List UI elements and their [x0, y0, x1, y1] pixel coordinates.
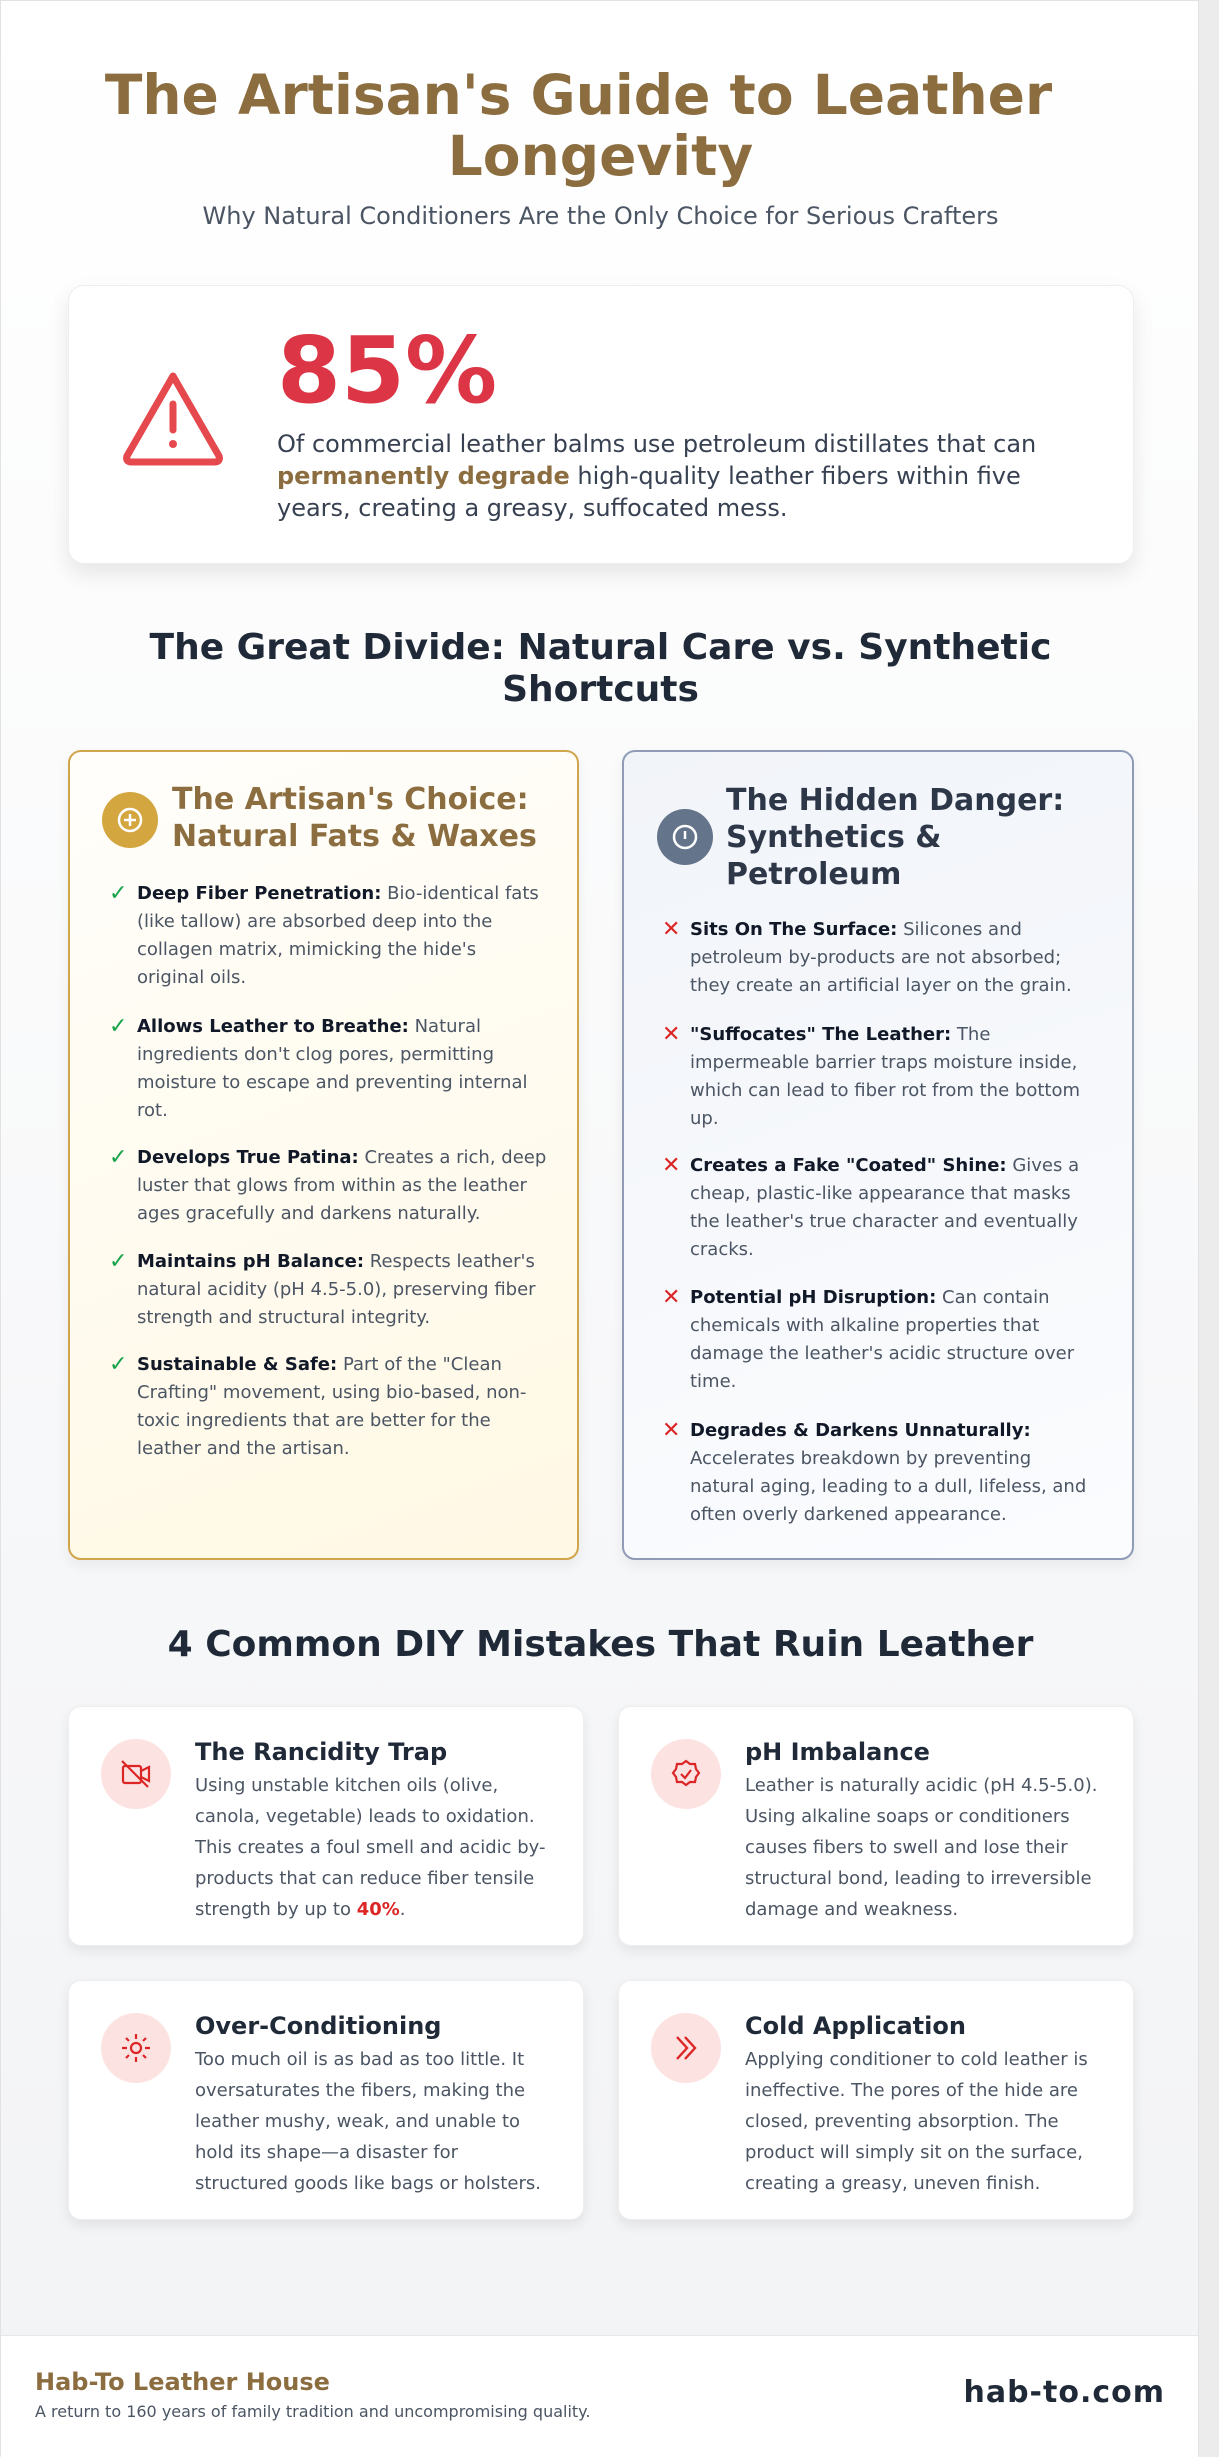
subtitle: Why Natural Conditioners Are the Only Choice for Serious Crafters: [202, 202, 998, 230]
panel: synthetic: Potential pH Disruption: Can contain chemicals with alkaline properties that damage the leather's acidic structure over time.: [690, 1287, 1074, 1392]
panel: synthetic: ✕: [662, 1022, 680, 1047]
panel: natural: Deep Fiber Penetration: Bio-identical fats (like tallow) are absorbed deep into the collagen matrix, mimicking the hide's original oils.: [137, 883, 539, 988]
panel: natural: Develops True Patina: Creates a rich, deep luster that glows from within as the leather ages gracefully and darkens naturally.: [137, 1147, 546, 1224]
card: ph: [618, 1706, 1134, 1946]
icon: [101, 2013, 171, 2083]
title: Over-Conditioning: [195, 2012, 441, 2040]
text: Leather is naturally acidic (pH 4.5-5.0). Using alkaline soaps or conditioners causes fibers to swell and lose their structural bond, leading to irreversible damage and weakness.: [745, 1775, 1097, 1920]
panel: synthetic: "Suffocates" The Leather: The impermeable barrier traps moisture inside, which can lead to fiber rot from the bottom up.: [690, 1024, 1080, 1129]
footer: [1, 2335, 1198, 2457]
panel heading: Natural Fats & Waxes: [172, 819, 537, 854]
tagline: A return to 160 years of family tradition and uncompromising quality.: [35, 2402, 590, 2421]
panel: synthetic: Sits On The Surface: Silicones and petroleum by-products are not absorbed; they create an artificial layer on the grain.: [690, 919, 1072, 996]
panel heading: Synthetics &: [726, 820, 941, 855]
text: Using unstable kitchen oils (olive, canola, vegetable) leads to oxidation. This creates a foul smell and acidic by-products that can reduce fiber tensile strength by up to 40%.: [195, 1775, 546, 1920]
panel heading: [172, 782, 537, 854]
stat number: 85%: [277, 317, 497, 424]
panel: natural: Maintains pH Balance: Respects leather's natural acidity (pH 4.5-5.0), preserving fiber strength and structural integrity.: [137, 1251, 536, 1328]
brand: Hab-To Leather House: [35, 2368, 330, 2396]
title: The Artisan's Guide to Leather: [105, 63, 1052, 127]
icon: [651, 1739, 721, 1809]
icon: [651, 2013, 721, 2083]
card: rancidity: [68, 1706, 584, 1946]
card: over-conditioning: [68, 1980, 584, 2220]
panel: natural: Allows Leather to Breathe: Natural ingredients don't clog pores, permitting moisture to escape and preventing internal rot.: [137, 1016, 528, 1121]
text: Applying conditioner to cold leather is ineffective. The pores of the hide are closed, preventing absorption. The product will simply sit on the surface, creating a greasy, uneven finish.: [745, 2049, 1088, 2194]
panel: natural: ✓: [109, 1014, 127, 1039]
panel: synthetic: Degrades & Darkens Unnaturally: Accelerates breakdown by preventing natural aging, leading to a dull, lifeless, and often overly darkened appearance.: [690, 1420, 1086, 1525]
icon: warning: [123, 372, 223, 466]
title: Longevity: [448, 124, 753, 188]
stat card: [68, 285, 1134, 564]
panel: natural: ✓: [109, 881, 127, 906]
title: pH Imbalance: [745, 1738, 930, 1766]
title: [105, 63, 1052, 188]
panel: natural: Sustainable & Safe: Part of the "Clean Crafting" movement, using bio-based, non-toxic ingredients that are better for the leather and the artisan.: [137, 1354, 526, 1459]
panel: synthetic: ✕: [662, 1153, 680, 1178]
list: [109, 881, 546, 1459]
heading: great divide: The Great Divide: Natural Care vs. Synthetic: [150, 627, 1051, 668]
stat text: Of commercial leather balms use petroleum distillates that can permanently degrade high-quality leather fibers within five years, creating a greasy, suffocated mess.: [277, 430, 1036, 522]
panel heading: The Hidden Danger:: [726, 783, 1064, 818]
list: [662, 917, 1086, 1525]
icon: leaf: [102, 792, 158, 848]
panel heading: Petroleum: [726, 857, 901, 892]
panel: natural: ✓: [109, 1145, 127, 1170]
heading: mistakes: 4 Common DIY Mistakes That Ruin Leather: [168, 1624, 1033, 1665]
panel: natural: ✓: [109, 1352, 127, 1377]
url: hab-to.com: [963, 2375, 1165, 2410]
panel: synthetic: ✕: [662, 1285, 680, 1310]
panel: natural: ✓: [109, 1249, 127, 1274]
panel: synthetic: [622, 750, 1134, 1560]
title: Cold Application: [745, 2012, 966, 2040]
icon: alert: [657, 809, 713, 865]
panel: synthetic: Creates a Fake "Coated" Shine: Gives a cheap, plastic-like appearance that masks the leather's true character and eventually cracks.: [690, 1155, 1079, 1260]
panel heading: The Artisan's Choice:: [172, 782, 529, 817]
icon: [101, 1739, 171, 1809]
panel heading: [726, 783, 1064, 892]
panel: synthetic: ✕: [662, 1418, 680, 1443]
text: Too much oil is as bad as too little. It oversaturates the fibers, making the leather mushy, weak, and unable to hold its shape—a disaster for structured goods like bags or holsters.: [195, 2049, 541, 2194]
heading: great divide: Shortcuts: [502, 669, 699, 710]
panel: natural: [68, 750, 579, 1560]
heading: great divide: [150, 627, 1051, 710]
card: cold: [618, 1980, 1134, 2220]
panel: synthetic: ✕: [662, 917, 680, 942]
title: The Rancidity Trap: [195, 1738, 447, 1766]
